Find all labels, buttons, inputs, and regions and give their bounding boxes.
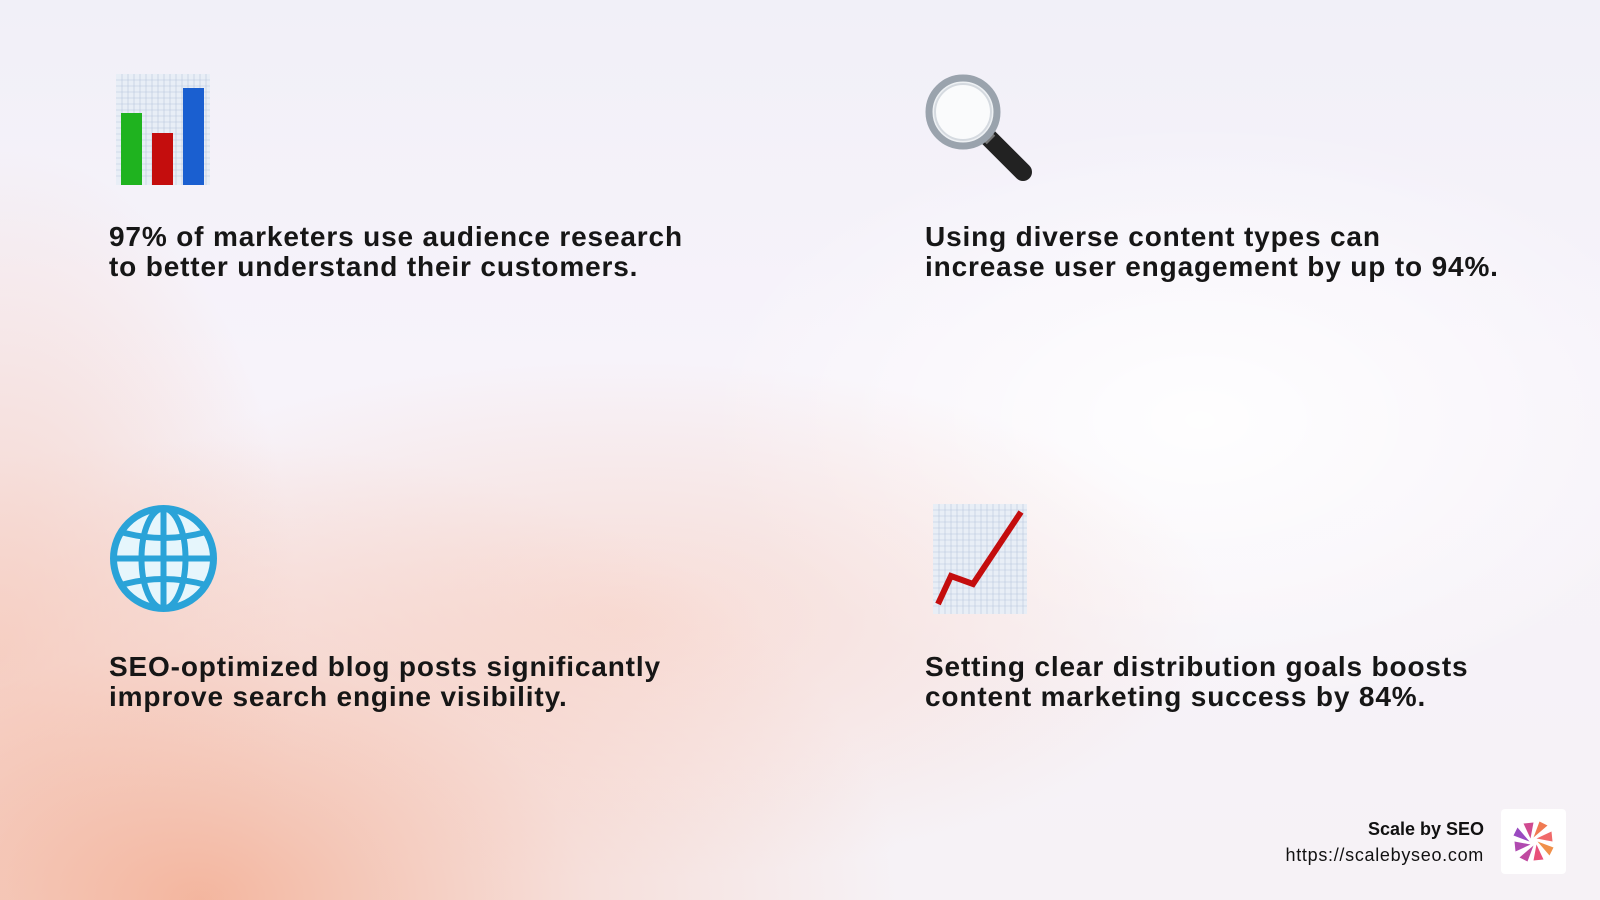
brand text xyxy=(1286,819,1484,865)
logo xyxy=(1501,809,1566,874)
text: stat 2: increase user engagement by up to 94%. xyxy=(925,251,1499,282)
text: stat 2 xyxy=(925,221,1499,282)
icon: line chart xyxy=(933,504,1027,614)
text: stat 4: Setting clear distribution goals boosts xyxy=(925,651,1468,682)
text: stat 1: 97% of marketers use audience research xyxy=(109,221,683,252)
text: stat 1 xyxy=(109,221,683,282)
icon: magnifier xyxy=(926,74,1032,181)
brand text: https://scalebyseo.com xyxy=(1286,845,1484,865)
text: stat 4 xyxy=(925,651,1468,712)
icon: bar chart xyxy=(116,74,210,185)
text: stat 3: SEO-optimized blog posts significantly xyxy=(109,651,661,682)
text: stat 1: to better understand their customers. xyxy=(109,251,638,282)
icon: globe xyxy=(110,505,217,612)
brand text: Scale by SEO xyxy=(1368,819,1484,839)
text: stat 2: Using diverse content types can xyxy=(925,221,1381,252)
text: stat 4: content marketing success by 84%. xyxy=(925,681,1426,712)
text: stat 3 xyxy=(109,651,661,712)
text: stat 3: improve search engine visibility. xyxy=(109,681,568,712)
